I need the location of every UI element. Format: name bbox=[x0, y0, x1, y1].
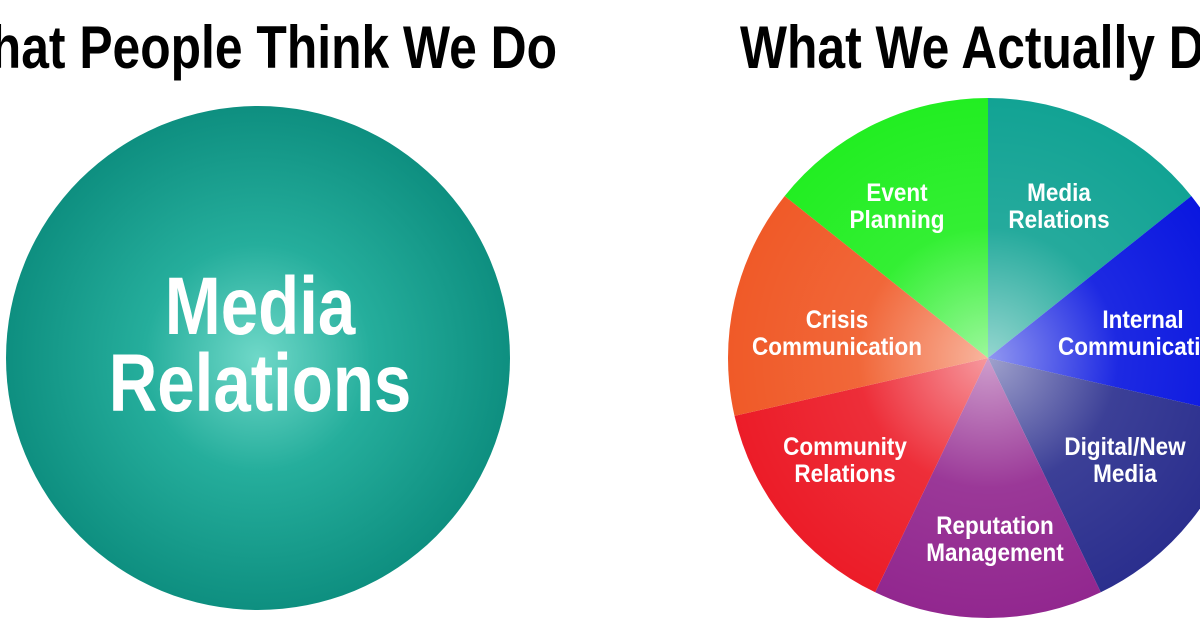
slice: reputation management bbox=[875, 358, 1101, 618]
slice: crisis communication bbox=[728, 196, 988, 416]
pie chart: Media bbox=[1027, 179, 1092, 207]
pie chart: Planning bbox=[850, 206, 944, 234]
pie chart bbox=[728, 98, 1200, 618]
pie chart: Relations bbox=[794, 460, 896, 488]
circle: media relations bbox=[6, 106, 510, 610]
slice: media relations bbox=[988, 98, 1191, 358]
slice: community relations bbox=[734, 358, 988, 592]
pie chart: Event bbox=[866, 179, 928, 207]
circle: media relations: Relations bbox=[109, 337, 411, 428]
pie chart: Digital/New bbox=[1064, 433, 1186, 461]
slice: event planning bbox=[785, 98, 988, 358]
pie chart: Internal bbox=[1102, 306, 1184, 334]
pie chart: Communication bbox=[752, 333, 922, 361]
slice: digital/new media bbox=[988, 358, 1200, 592]
pie chart: Management bbox=[926, 539, 1064, 567]
pie chart: Community bbox=[783, 433, 908, 461]
pie chart: Reputation bbox=[936, 512, 1054, 540]
slice: internal communication bbox=[988, 196, 1200, 416]
pie chart: Media bbox=[1093, 460, 1158, 488]
pie chart: Relations bbox=[1008, 206, 1110, 234]
circle: media relations: Media bbox=[165, 260, 356, 351]
pie chart: Crisis bbox=[806, 306, 868, 334]
